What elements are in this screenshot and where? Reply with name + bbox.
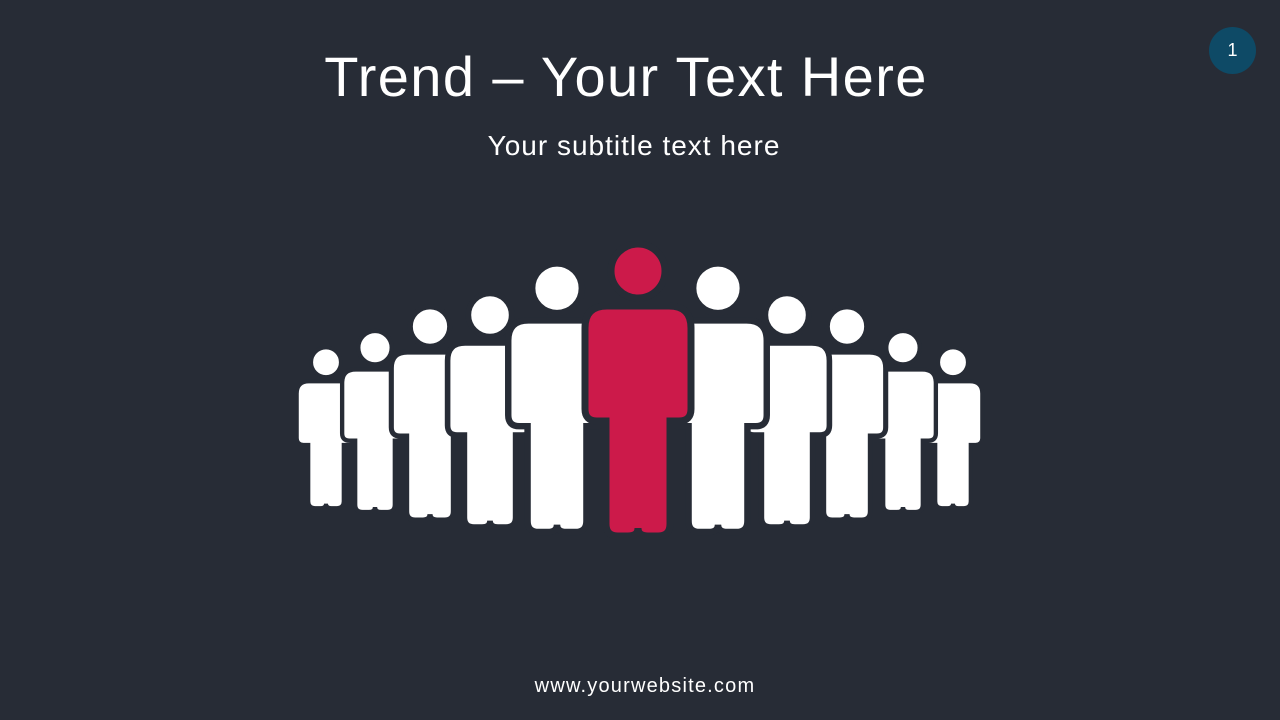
figure 8 — [745, 293, 829, 527]
website footer: www.yourwebsite.com — [535, 675, 755, 697]
figure 11 — [924, 347, 982, 508]
page number badge — [1209, 27, 1256, 74]
figure 5 — [508, 263, 606, 532]
figure 4 — [448, 293, 532, 527]
subtitle: Your subtitle text here — [488, 130, 780, 161]
figure 1 — [297, 347, 355, 508]
title: Trend – Your Text Here — [324, 45, 928, 108]
figure 10 — [870, 331, 936, 512]
figure 3 — [391, 307, 469, 520]
figure 9 — [808, 307, 886, 520]
page number badge: 1 — [1227, 40, 1238, 60]
figure 7 — [669, 263, 767, 532]
red figure — [585, 244, 691, 536]
figure 2 — [342, 331, 408, 512]
